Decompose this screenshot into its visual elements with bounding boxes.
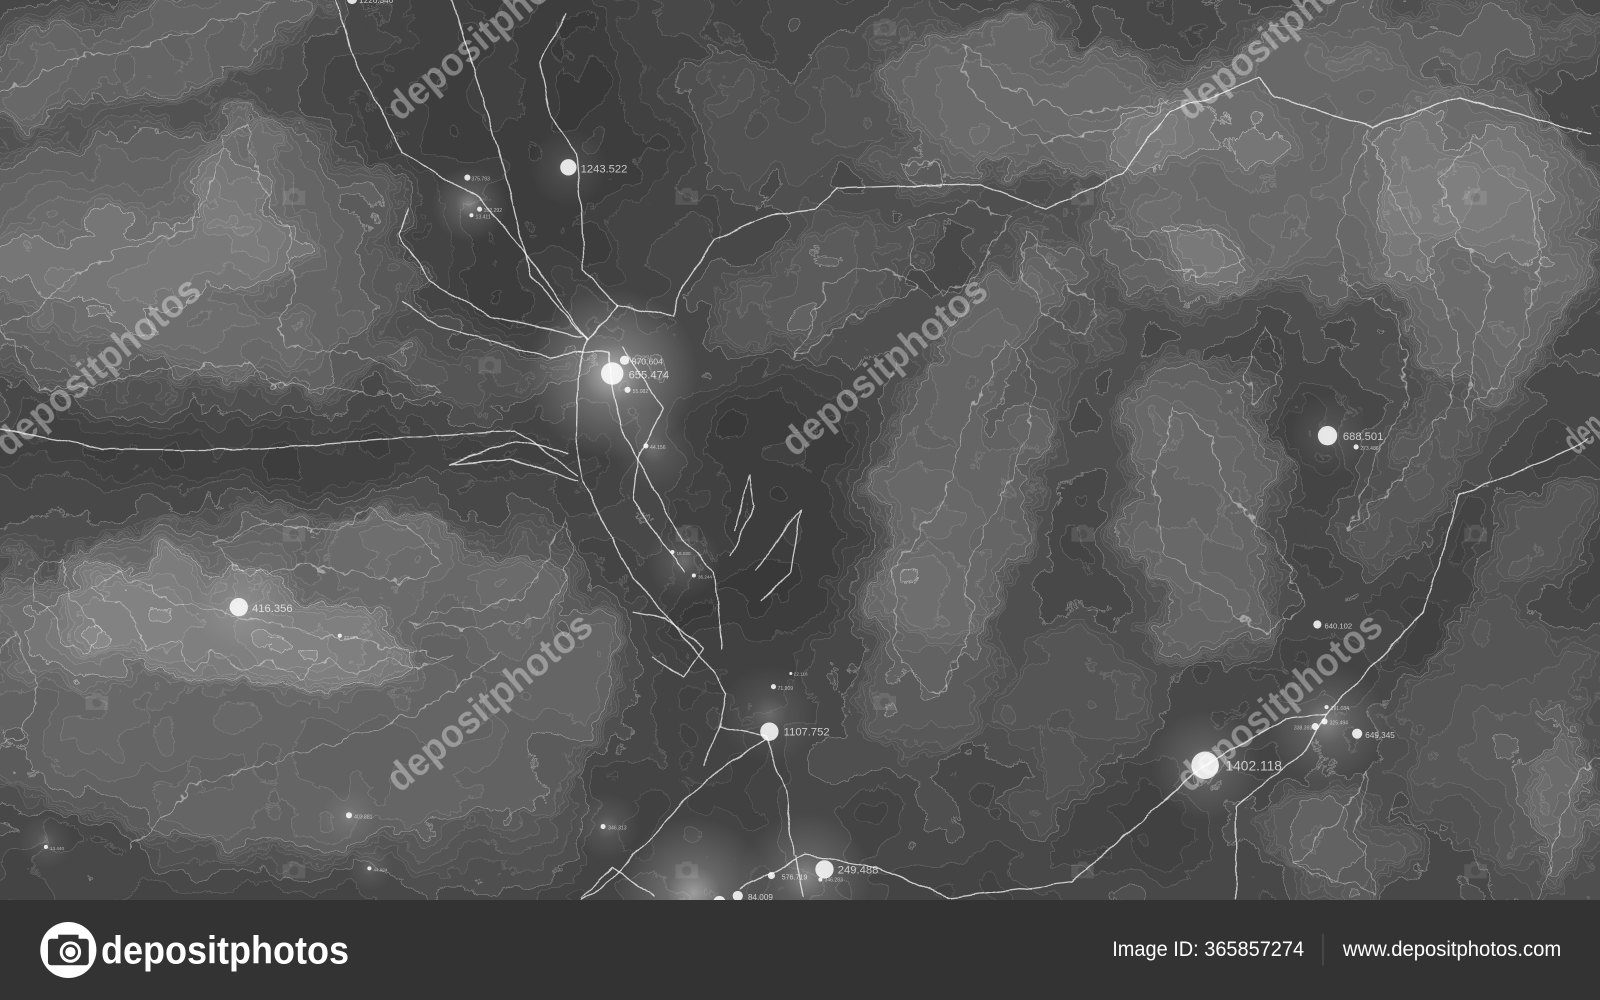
- marker: 325.494: [1321, 718, 1348, 726]
- marker: 13.411: 13.411: [476, 214, 491, 220]
- marker: 55.082: [624, 387, 648, 395]
- footer divider: [1322, 934, 1323, 965]
- marker: 44.156: [643, 443, 666, 451]
- marker: 1243.522: [560, 159, 627, 176]
- marker: 13.440: [44, 845, 64, 851]
- marker: 22.116: 22.116: [794, 672, 808, 677]
- marker: 36.244: [692, 573, 712, 580]
- marker: central city: 655.474: [629, 370, 669, 382]
- marker: 338.393: 338.393: [1294, 726, 1312, 732]
- depositphotos diagonal watermarks: depositphotos: [378, 604, 601, 801]
- marker: 346.313: 346.313: [608, 826, 627, 832]
- marker: 688.501: 688.501: [1343, 431, 1383, 443]
- depositphotos diagonal watermarks: depositphotos: [773, 268, 996, 465]
- marker: 640.102: [1313, 620, 1352, 631]
- marker: 403.881: 403.881: [354, 814, 373, 820]
- marker: 13.440: 13.440: [50, 846, 64, 851]
- marker: 403.881: [346, 812, 373, 820]
- marker: 191.084: 191.084: [1331, 706, 1349, 712]
- footer bar: [0, 900, 1600, 1000]
- faint camera watermark icons: [86, 19, 1487, 878]
- marker: 870.604: 870.604: [632, 356, 663, 366]
- marker: 576.719: [768, 872, 807, 882]
- marker: 1107.752: [760, 722, 830, 741]
- marker: 44.924: 44.924: [373, 867, 388, 872]
- marker: 1107.752: 1107.752: [784, 727, 830, 739]
- marker: 249.488: [815, 860, 878, 879]
- marker: 1243.522: 1243.522: [581, 163, 627, 175]
- marker: 640.102: 640.102: [1324, 622, 1352, 631]
- marker: 18.030: [670, 550, 691, 556]
- marker: 36.244: 36.244: [698, 575, 712, 580]
- marker: 273.486: [1354, 444, 1379, 452]
- marker: 338.393: [1294, 723, 1319, 732]
- marker: central city: [601, 362, 669, 385]
- marker: 13.411: [469, 213, 491, 220]
- marker: 273.486: 273.486: [1360, 446, 1379, 452]
- marker: 44.924: [367, 866, 388, 872]
- marker: 84.009: [714, 890, 772, 900]
- marker: 346.283: 346.283: [824, 878, 843, 884]
- light glows around settlements: [30, 144, 1373, 900]
- marker: 84.009: 84.009: [748, 893, 773, 902]
- marker: 249.488: 249.488: [838, 864, 878, 876]
- marker: 688.501: [1318, 426, 1383, 445]
- marker: 44.156: 44.156: [650, 445, 666, 451]
- marker: 375.793: [464, 174, 490, 183]
- marker: 649.345: 649.345: [1365, 731, 1395, 740]
- marker: 416.356: 416.356: [252, 603, 293, 615]
- marker: 71.909: [771, 684, 793, 692]
- depositphotos diagonal watermarks: depositphotos: [1168, 604, 1391, 801]
- settlement markers and values: [44, 0, 1395, 908]
- marker: 1226.346: [347, 0, 393, 4]
- marker: 71.909: 71.909: [778, 686, 793, 692]
- marker: 102.292: [477, 207, 502, 214]
- website url: www.depositphotos.com: [1342, 937, 1561, 961]
- wordmark: depositphotos: [101, 929, 349, 972]
- marker: 55.082: 55.082: [633, 389, 648, 395]
- marker: 416.356: [230, 598, 293, 616]
- marker: 23.899: [338, 634, 358, 640]
- marker: 346.313: [601, 824, 627, 832]
- marker: 576.719: 576.719: [782, 874, 807, 882]
- marker: 18.030: 18.030: [677, 551, 691, 556]
- marker: 325.494: 325.494: [1330, 720, 1348, 726]
- marker: 102.292: 102.292: [484, 208, 502, 214]
- icon: camera badge: [40, 922, 96, 978]
- footer logo: camera icon and wordmark: [40, 922, 349, 978]
- marker: 1402.118: [1191, 752, 1282, 779]
- marker: 23.899: 23.899: [344, 635, 358, 640]
- marker: 1402.118: 1402.118: [1226, 758, 1282, 773]
- marker: 375.793: 375.793: [471, 177, 490, 183]
- image id: Image ID: 365857274: [1112, 937, 1304, 961]
- marker: 649.345: [1352, 729, 1395, 740]
- marker: 870.604: [620, 356, 663, 366]
- marker: 191.084: [1324, 705, 1349, 712]
